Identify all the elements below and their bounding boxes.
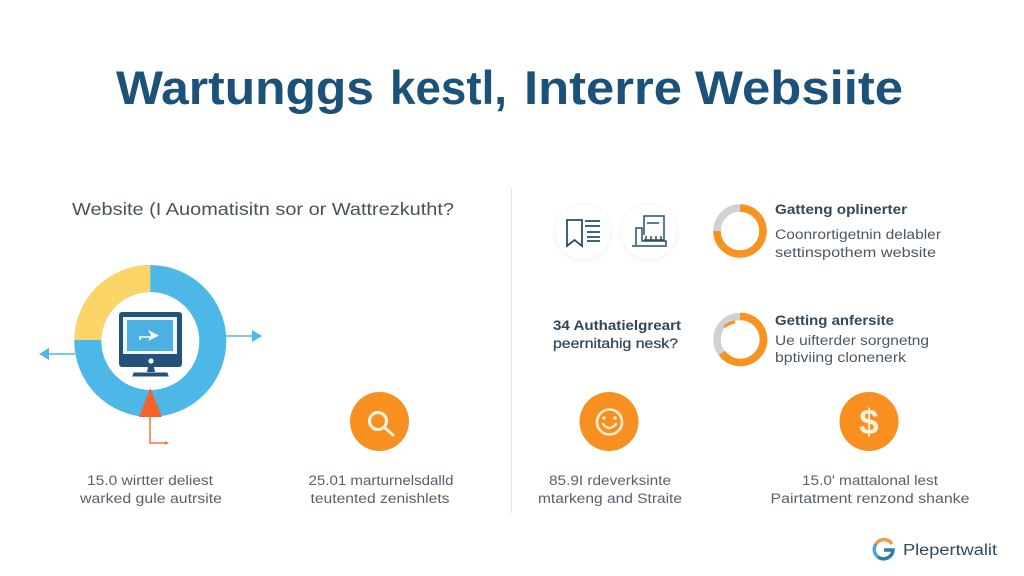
stat text 2	[308, 473, 454, 506]
title: Interre	[524, 61, 682, 114]
title	[116, 61, 903, 114]
stat text 2: 25.01 marturnelsdalld	[308, 473, 454, 488]
arrow: left	[39, 348, 75, 360]
icon: dollar: $	[859, 403, 879, 442]
title: Websiite	[695, 61, 903, 114]
icon: building circle	[622, 205, 676, 259]
stat text 3: 85.9I rdeverksinte	[549, 473, 671, 488]
stat text 1	[79, 473, 222, 506]
stat text 4	[770, 473, 970, 506]
icon: monitor	[119, 312, 182, 376]
title: Wartunggs	[116, 61, 374, 114]
text block: middle right: Ue uifterder sorgnetng	[775, 333, 929, 348]
donut ring	[74, 265, 213, 404]
question text	[553, 318, 682, 351]
question text: peernitahig nesk?	[553, 336, 678, 351]
icon: logo mark	[874, 540, 893, 559]
text block: top right	[775, 202, 942, 260]
donut: top right	[717, 208, 763, 254]
stat text 3: mtarkeng and Straite	[538, 491, 682, 506]
text block: top right: Coonrortigetnin delabler	[775, 227, 942, 242]
icon: dollar	[840, 392, 898, 451]
question text: 34 Authatielgreart	[553, 318, 682, 333]
text block: top right: Gatteng oplinerter	[775, 202, 908, 217]
left panel heading: Website (I Auomatisitn sor or Wattrezkutht?	[72, 199, 454, 219]
stat text 1: warked gule autrsite	[79, 491, 222, 506]
stat text 2: teutented zenishlets	[310, 491, 450, 506]
icon: smiley	[580, 392, 638, 451]
title: kestl,	[390, 61, 507, 114]
arrow: orange pointer	[139, 388, 169, 445]
stat text 4: Pairtatment renzond shanke	[770, 491, 970, 506]
text block: middle right: bptiviing clonenerk	[775, 350, 906, 365]
stat text 4: 15.0' mattalonal lest	[802, 473, 938, 488]
stat text 1: 15.0 wirtter deliest	[87, 473, 213, 488]
text block: top right: settinspothem website	[775, 245, 936, 260]
arrow: right	[226, 330, 262, 342]
stat text 3	[538, 473, 682, 506]
text block: middle right	[775, 313, 929, 365]
logo text: Plepertwalit	[903, 542, 998, 559]
donut chart with monitor	[39, 265, 262, 445]
icon: document circle	[556, 205, 610, 259]
logo	[874, 540, 998, 559]
donut: middle right	[717, 316, 764, 362]
icon: magnifier	[350, 392, 409, 451]
text block: middle right: Getting anfersite	[775, 313, 895, 328]
